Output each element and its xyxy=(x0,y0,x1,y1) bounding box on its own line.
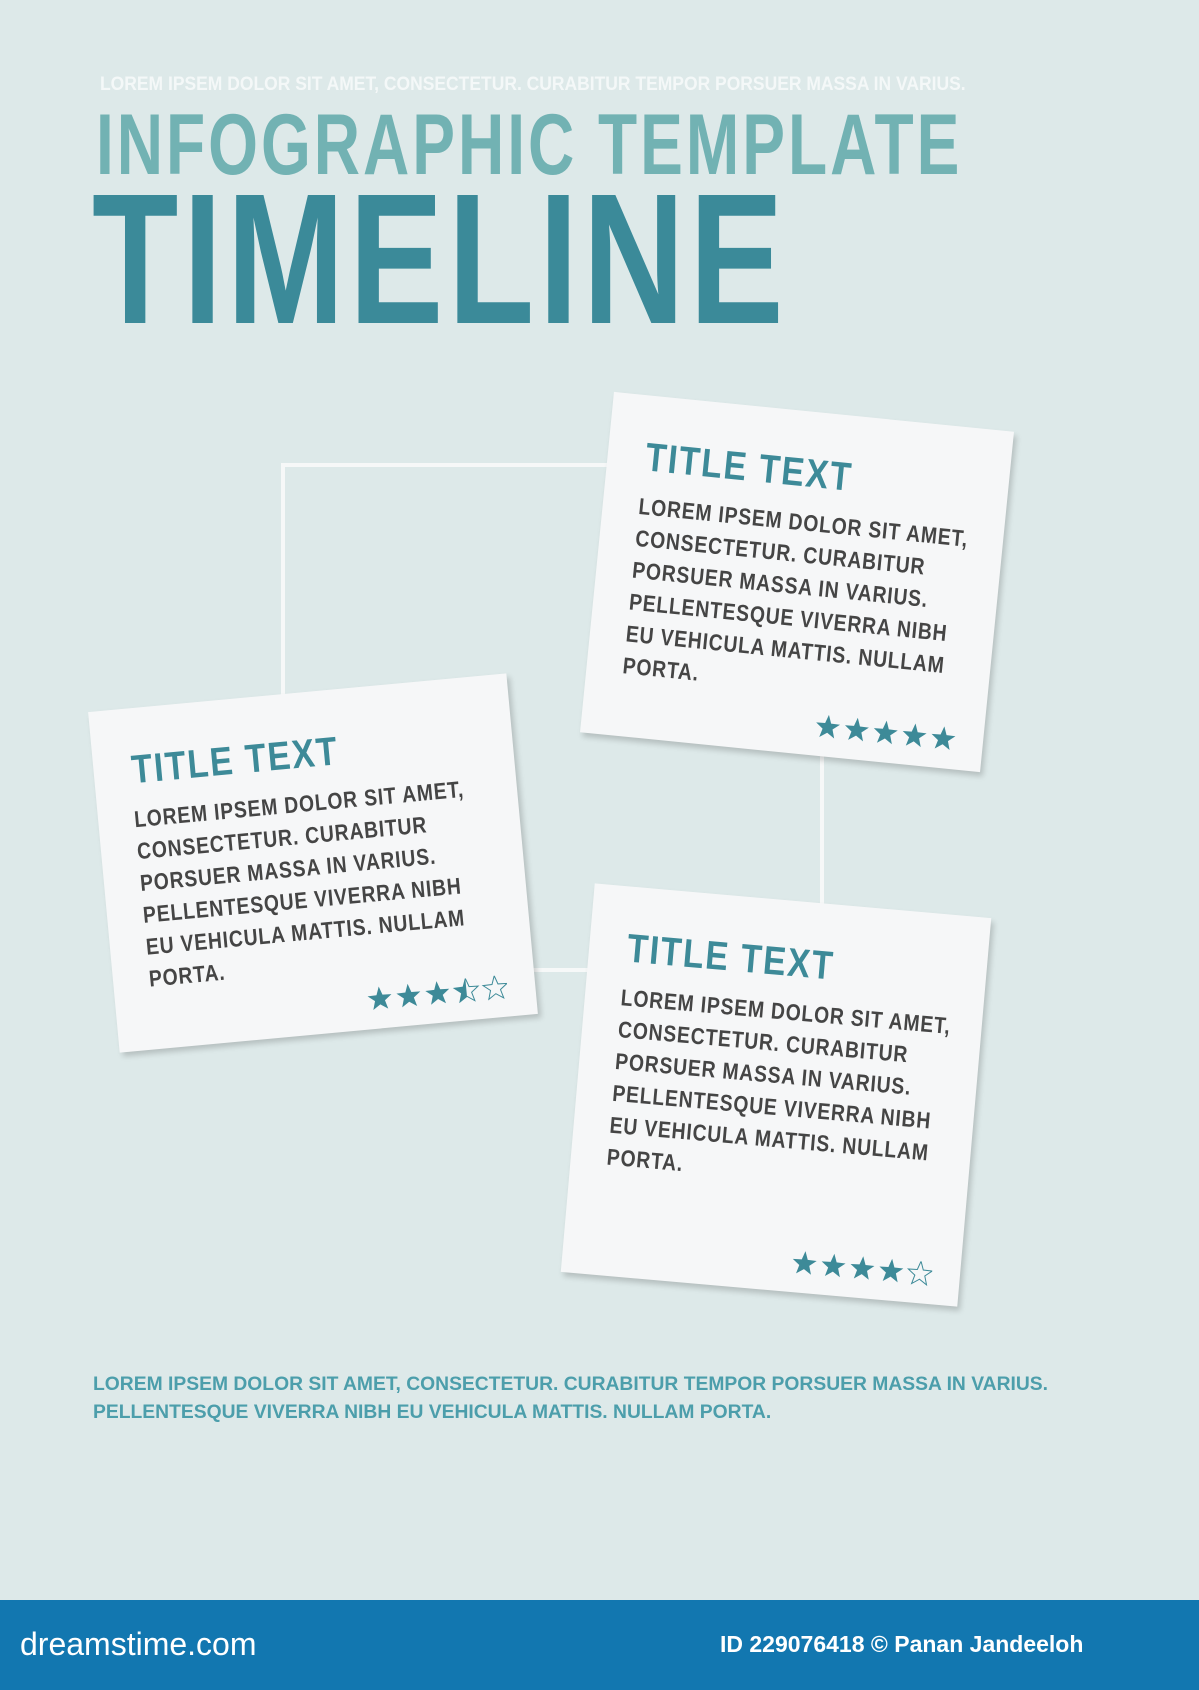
card body text xyxy=(133,776,466,992)
card body text: CONSECTETUR. CURABITUR xyxy=(634,525,927,580)
card body text: PORTA. xyxy=(606,1144,684,1176)
card body text: LOREM IPSEM DOLOR SIT AMET, xyxy=(133,776,465,832)
card body text: EU VEHICULA MATTIS. NULLAM xyxy=(609,1112,930,1165)
panel: card left xyxy=(88,673,538,1053)
heading: timeline: TIMELINE xyxy=(92,156,788,363)
card body text: PELLENTESQUE VIVERRA NIBH xyxy=(628,588,949,646)
card body text: EU VEHICULA MATTIS. NULLAM xyxy=(145,904,466,960)
bottom brand bar xyxy=(0,1600,1199,1690)
card body text: EU VEHICULA MATTIS. NULLAM xyxy=(625,620,946,678)
card body text: CONSECTETUR. CURABITUR xyxy=(617,1016,909,1067)
card body text: PORSUER MASSA IN VARIUS. xyxy=(139,843,437,896)
card body text: PORSUER MASSA IN VARIUS. xyxy=(614,1048,912,1100)
card title: TITLE TEXT xyxy=(625,927,836,988)
panel: card top right xyxy=(580,392,1014,772)
card title: TITLE TEXT xyxy=(130,729,341,792)
card body text: PELLENTESQUE VIVERRA NIBH xyxy=(142,872,463,928)
brand logo text: dreamstime.com xyxy=(20,1626,256,1662)
card body text: PORTA. xyxy=(622,652,700,686)
card body text xyxy=(622,493,970,686)
card body text: CONSECTETUR. CURABITUR xyxy=(136,811,428,864)
rating stars 3.5 xyxy=(368,976,507,1010)
rating stars 4 xyxy=(793,1251,932,1286)
footer text xyxy=(93,1374,1048,1423)
card title: TITLE TEXT xyxy=(643,435,855,500)
top subtitle: LOREM IPSEM DOLOR SIT AMET, CONSECTETUR. CURABITUR TEMPOR PORSUER MASSA IN VARIUS. xyxy=(100,74,966,95)
heading: infographic template: INFOGRAPHIC TEMPLATE xyxy=(96,97,962,193)
panel: card bottom right xyxy=(561,883,991,1307)
card body text: PELLENTESQUE VIVERRA NIBH xyxy=(611,1080,932,1134)
rating stars 5 xyxy=(816,715,956,750)
footer text: PELLENTESQUE VIVERRA NIBH EU VEHICULA MATTIS. NULLAM PORTA. xyxy=(93,1402,771,1423)
card body text xyxy=(606,984,952,1176)
card body text: PORTA. xyxy=(148,959,226,992)
card body text: LOREM IPSEM DOLOR SIT AMET, xyxy=(620,984,952,1039)
image id credit: ID 229076418 © Panan Jandeeloh xyxy=(720,1631,1083,1657)
footer text: LOREM IPSEM DOLOR SIT AMET, CONSECTETUR. CURABITUR TEMPOR PORSUER MASSA IN VARIUS. xyxy=(93,1374,1048,1395)
card body text: LOREM IPSEM DOLOR SIT AMET, xyxy=(637,493,970,552)
card body text: PORSUER MASSA IN VARIUS. xyxy=(631,557,929,612)
